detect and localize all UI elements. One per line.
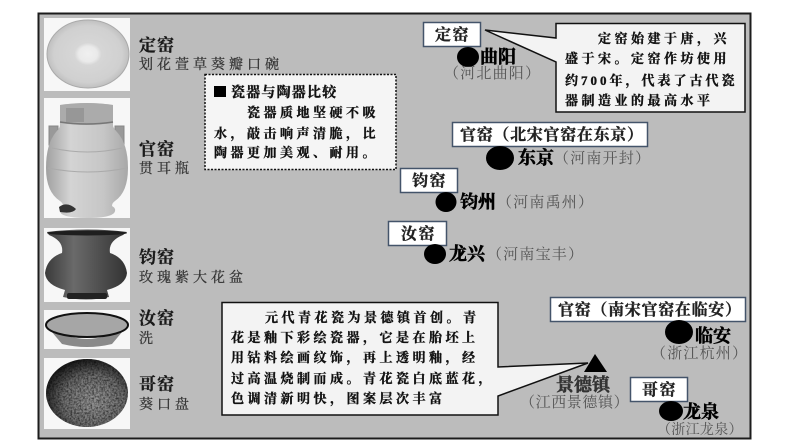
marker: Junzhou: 钧州 xyxy=(460,192,496,212)
callout: Yuan blue and white porcelain: 花是釉下彩绘瓷器，它是在胎坯上 xyxy=(231,330,479,346)
kiln tag: Ding xyxy=(424,22,480,46)
kiln tag: Ru: 汝窑 xyxy=(401,224,436,243)
photo: Ding ware bowl xyxy=(44,18,130,91)
callout: Yuan blue and white porcelain: 过高温烧制而成。青花瓷白底蓝花， xyxy=(231,371,495,387)
photo: Jun ware flowerpot xyxy=(44,228,130,302)
callout: Ding ware history xyxy=(485,24,745,112)
label: Ge ware: 葵口盘 xyxy=(139,396,193,413)
kiln tag: Southern Song Guan: 官窑（南宋官窑在临安） xyxy=(558,300,742,319)
marker: Dongjing: （河南开封） xyxy=(554,150,651,167)
callout: Ding ware history: 盛于宋。定窑作坊使用 xyxy=(565,51,730,66)
marker: Longquan: （浙江龙泉） xyxy=(657,421,743,438)
marker: Junzhou: （河南禹州） xyxy=(497,194,594,211)
callout: Yuan blue and white porcelain: 用钴料绘画纹饰，再上透明釉，经 xyxy=(231,350,479,366)
marker: Longxing: 龙兴 xyxy=(449,244,486,264)
text box: porcelain vs pottery: 瓷器质地坚硬不吸 xyxy=(247,105,379,120)
marker: Longxing: （河南宝丰） xyxy=(487,246,584,263)
text box: porcelain vs pottery: 水，敲击响声清脆，比 xyxy=(214,126,379,142)
marker: Jingdezhen: （江西景德镇） xyxy=(520,393,629,411)
marker: Quyang: （河北曲阳） xyxy=(444,65,541,82)
callout: Ding ware history: 定窑始建于唐，兴 xyxy=(598,31,730,47)
label: Ru ware xyxy=(139,309,175,347)
kiln tag: Jun: 钧窑 xyxy=(412,171,447,190)
marker: Longquan xyxy=(657,401,743,438)
text box: porcelain vs pottery xyxy=(205,74,396,170)
marker: Junzhou xyxy=(436,192,594,212)
marker: Longxing xyxy=(424,244,584,264)
kiln tag: Southern Song Guan xyxy=(550,298,746,322)
label: Jun ware: 玫瑰紫大花盆 xyxy=(139,269,247,286)
label: Guan ware: 官窑 xyxy=(139,140,175,159)
label: Ru ware: 洗 xyxy=(139,331,157,347)
photo: Ge ware plate xyxy=(44,358,130,429)
label: Ding ware: 定窑 xyxy=(139,36,175,55)
marker: Dongjing xyxy=(486,146,651,170)
callout: Ding ware history: 约700年，代表了古代瓷 xyxy=(565,73,738,89)
callout: Yuan blue and white porcelain: 色调清新明快，图案层次丰富 xyxy=(231,391,446,407)
kiln tag: Jun xyxy=(400,168,458,192)
marker: Dongjing: 东京 xyxy=(518,147,555,168)
label: Ru ware: 汝窑 xyxy=(139,309,175,328)
kiln tag: Northern Song Guan: 官窑（北宋官窑在东京） xyxy=(460,125,644,144)
photo: Guan ware vase xyxy=(44,98,130,218)
marker: Lin'an: 临安 xyxy=(695,326,732,346)
kiln tag: Ding: 定窑 xyxy=(435,25,470,44)
label: Jun ware: 钧窑 xyxy=(139,248,175,267)
kiln tag: Ru xyxy=(388,222,446,246)
label: Ding ware: 划花萱草葵瓣口碗 xyxy=(139,56,283,73)
photo: Ru ware washer xyxy=(44,310,130,349)
kiln tag: Ge: 哥窑 xyxy=(642,380,677,399)
marker: Lin'an xyxy=(651,320,748,362)
marker: Jingdezhen xyxy=(520,354,629,411)
kiln tag: Northern Song Guan xyxy=(452,122,648,146)
marker: Jingdezhen: 景德镇 xyxy=(556,375,613,395)
marker: Longquan: 龙泉 xyxy=(683,401,719,422)
marker: Quyang xyxy=(444,47,541,82)
kiln tag: Ge xyxy=(630,378,688,402)
label: Guan ware xyxy=(139,140,193,177)
label: Jun ware xyxy=(139,248,247,286)
callout: Ding ware history: 器制造业的最高水平 xyxy=(565,93,714,108)
text box: porcelain vs pottery: 瓷器与陶器比较 xyxy=(231,84,337,101)
label: Ge ware: 哥窑 xyxy=(139,374,175,394)
callout: Yuan blue and white porcelain: 元代青花瓷为景德镇首创。青 xyxy=(265,310,480,325)
text box: porcelain vs pottery: 陶器更加美观、耐用。 xyxy=(214,145,379,160)
label: Ge ware xyxy=(139,374,193,413)
callout: Yuan blue and white porcelain xyxy=(222,302,588,415)
label: Ding ware xyxy=(139,36,283,73)
marker: Quyang: 曲阳 xyxy=(480,47,516,67)
marker: Lin'an: （浙江杭州） xyxy=(651,344,748,362)
label: Guan ware: 贯耳瓶 xyxy=(139,161,193,177)
